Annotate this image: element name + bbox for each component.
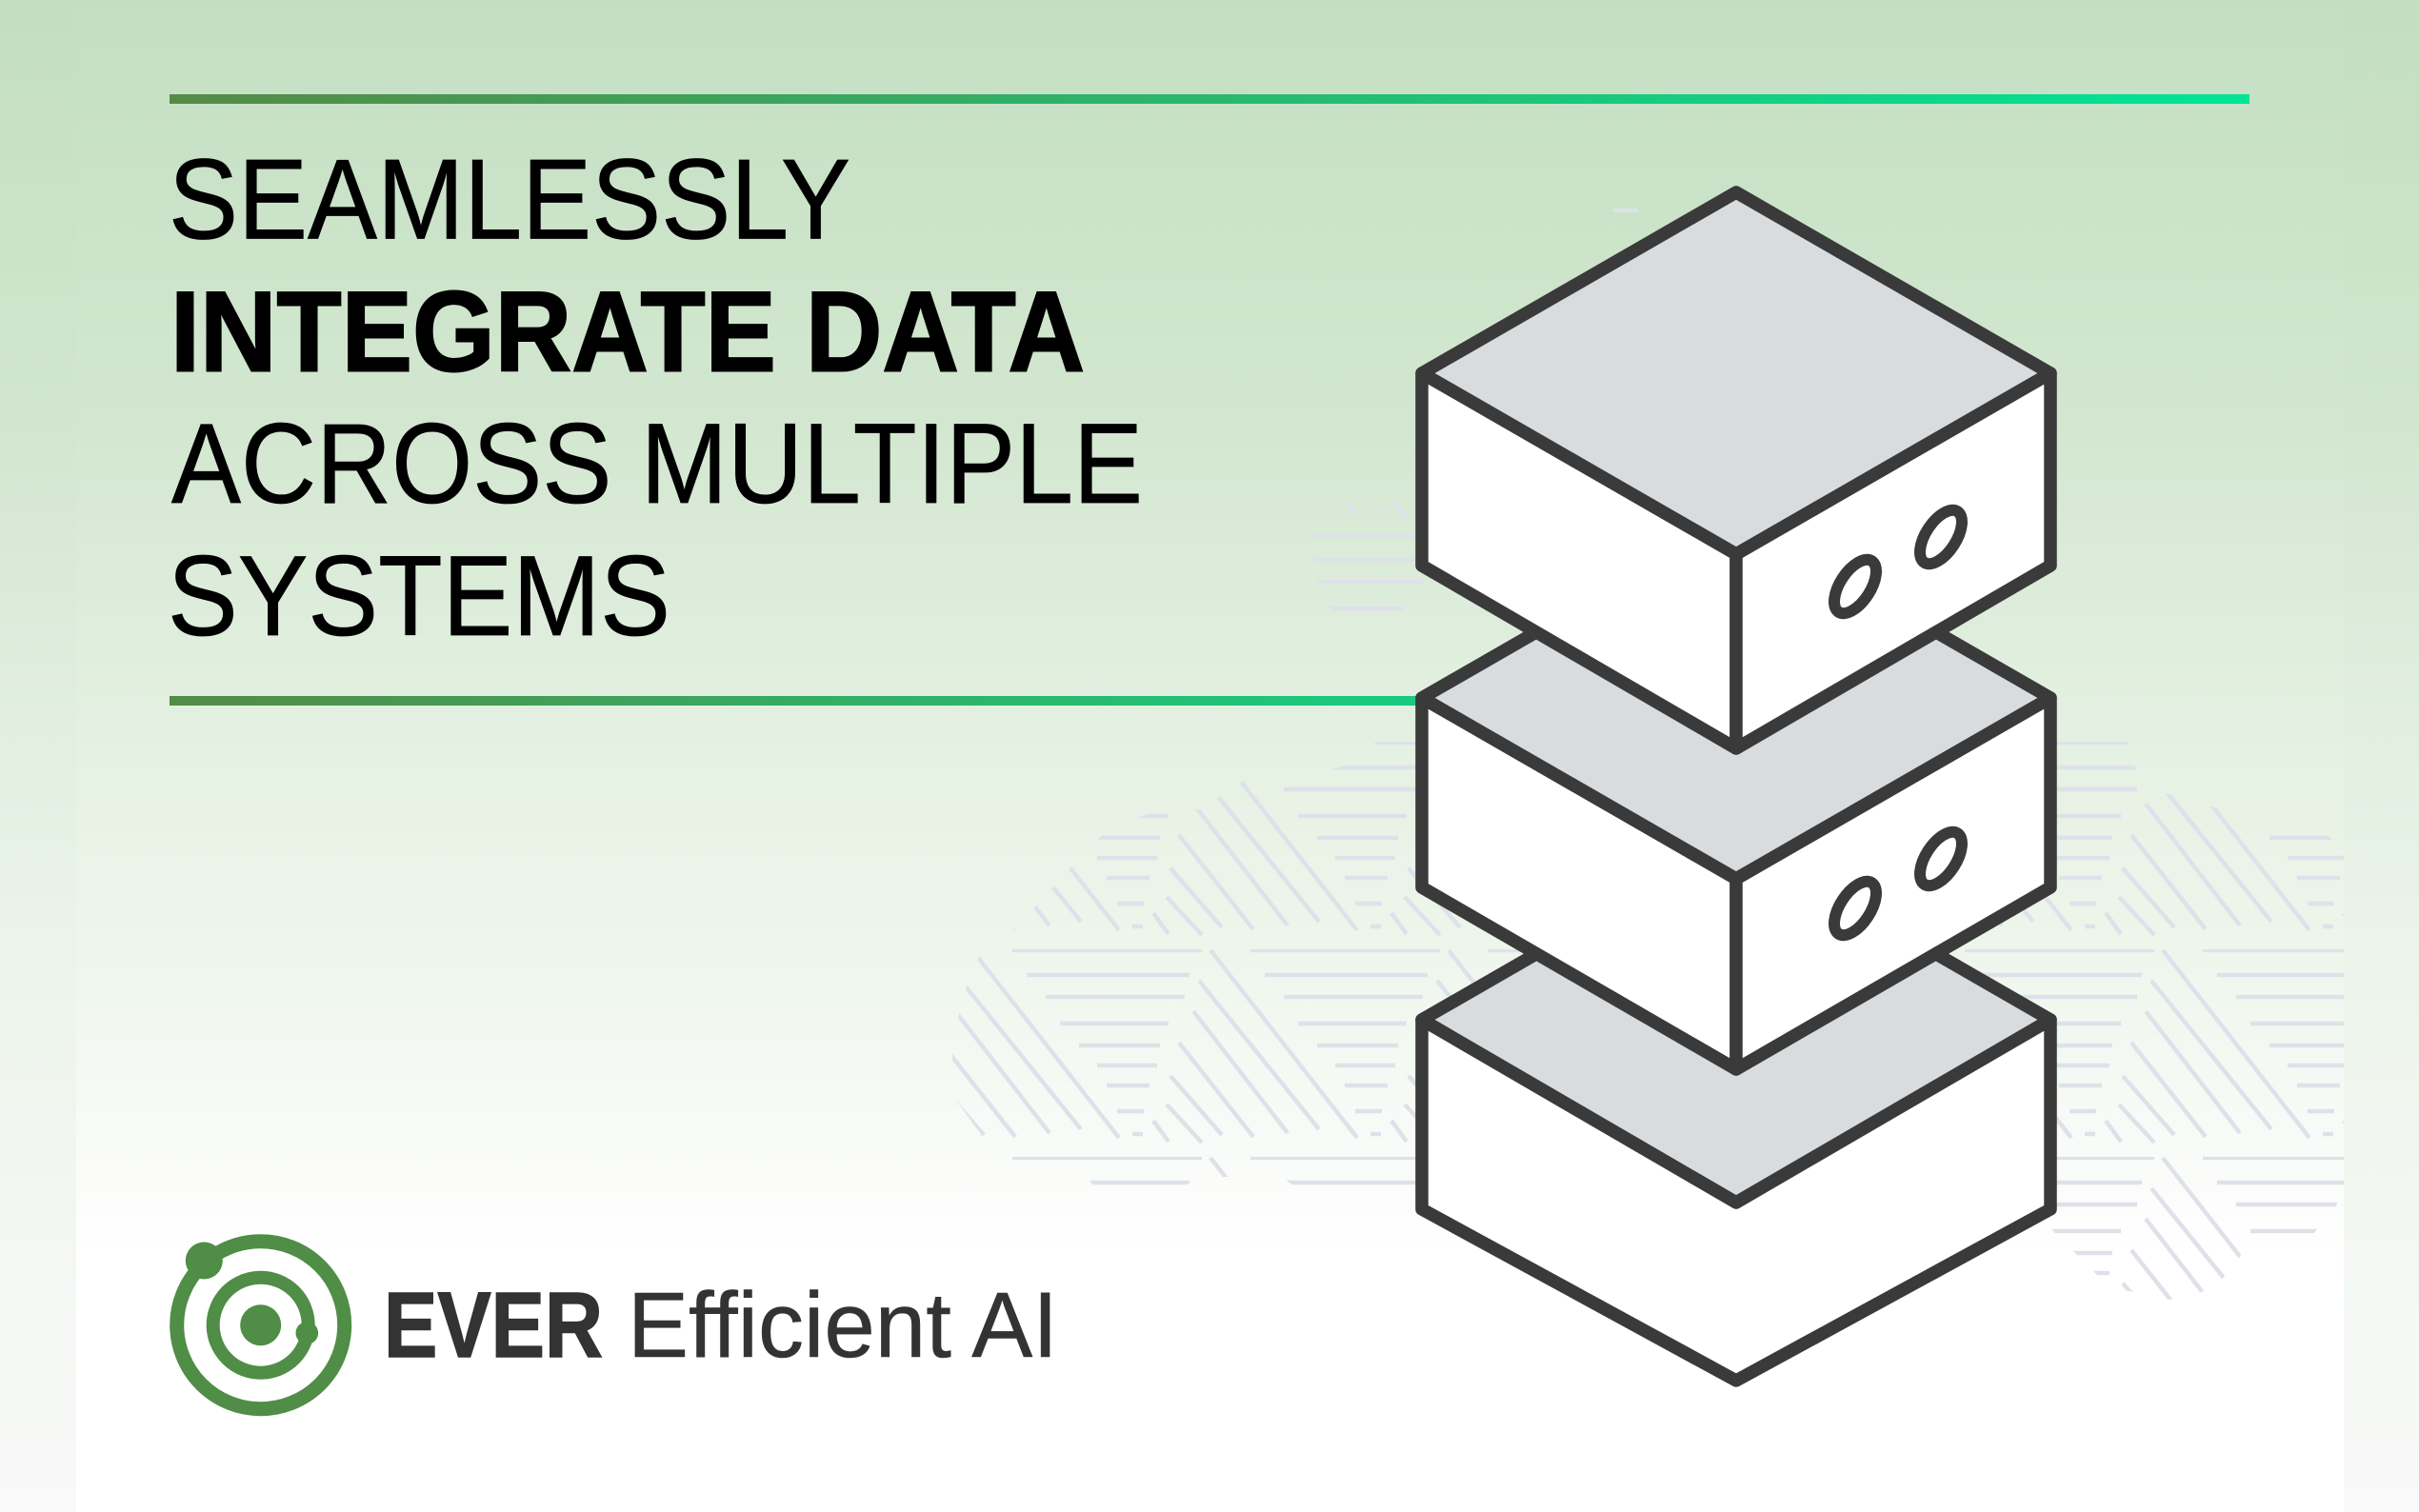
top box (1422, 192, 2050, 748)
isometric stack illustration (1422, 192, 2050, 1381)
logo wordmark: EVER (384, 1273, 603, 1377)
hatch pattern backdrop (952, 209, 2344, 1300)
title (168, 135, 1143, 660)
logo wordmark: Efficient AI (628, 1273, 1058, 1377)
title: SEAMLESSLY (169, 135, 850, 263)
top gradient rule (170, 94, 2249, 104)
title: INTEGRATE DATA (170, 269, 1085, 396)
title: ACROSS MULTIPLE (171, 400, 1143, 527)
logo mark (177, 1242, 345, 1409)
title: SYSTEMS (168, 532, 670, 660)
middle box (1422, 517, 2050, 1069)
bottom gradient rule (170, 696, 1427, 706)
logo wordmark (384, 1273, 1058, 1377)
bottom box (1422, 839, 2050, 1381)
